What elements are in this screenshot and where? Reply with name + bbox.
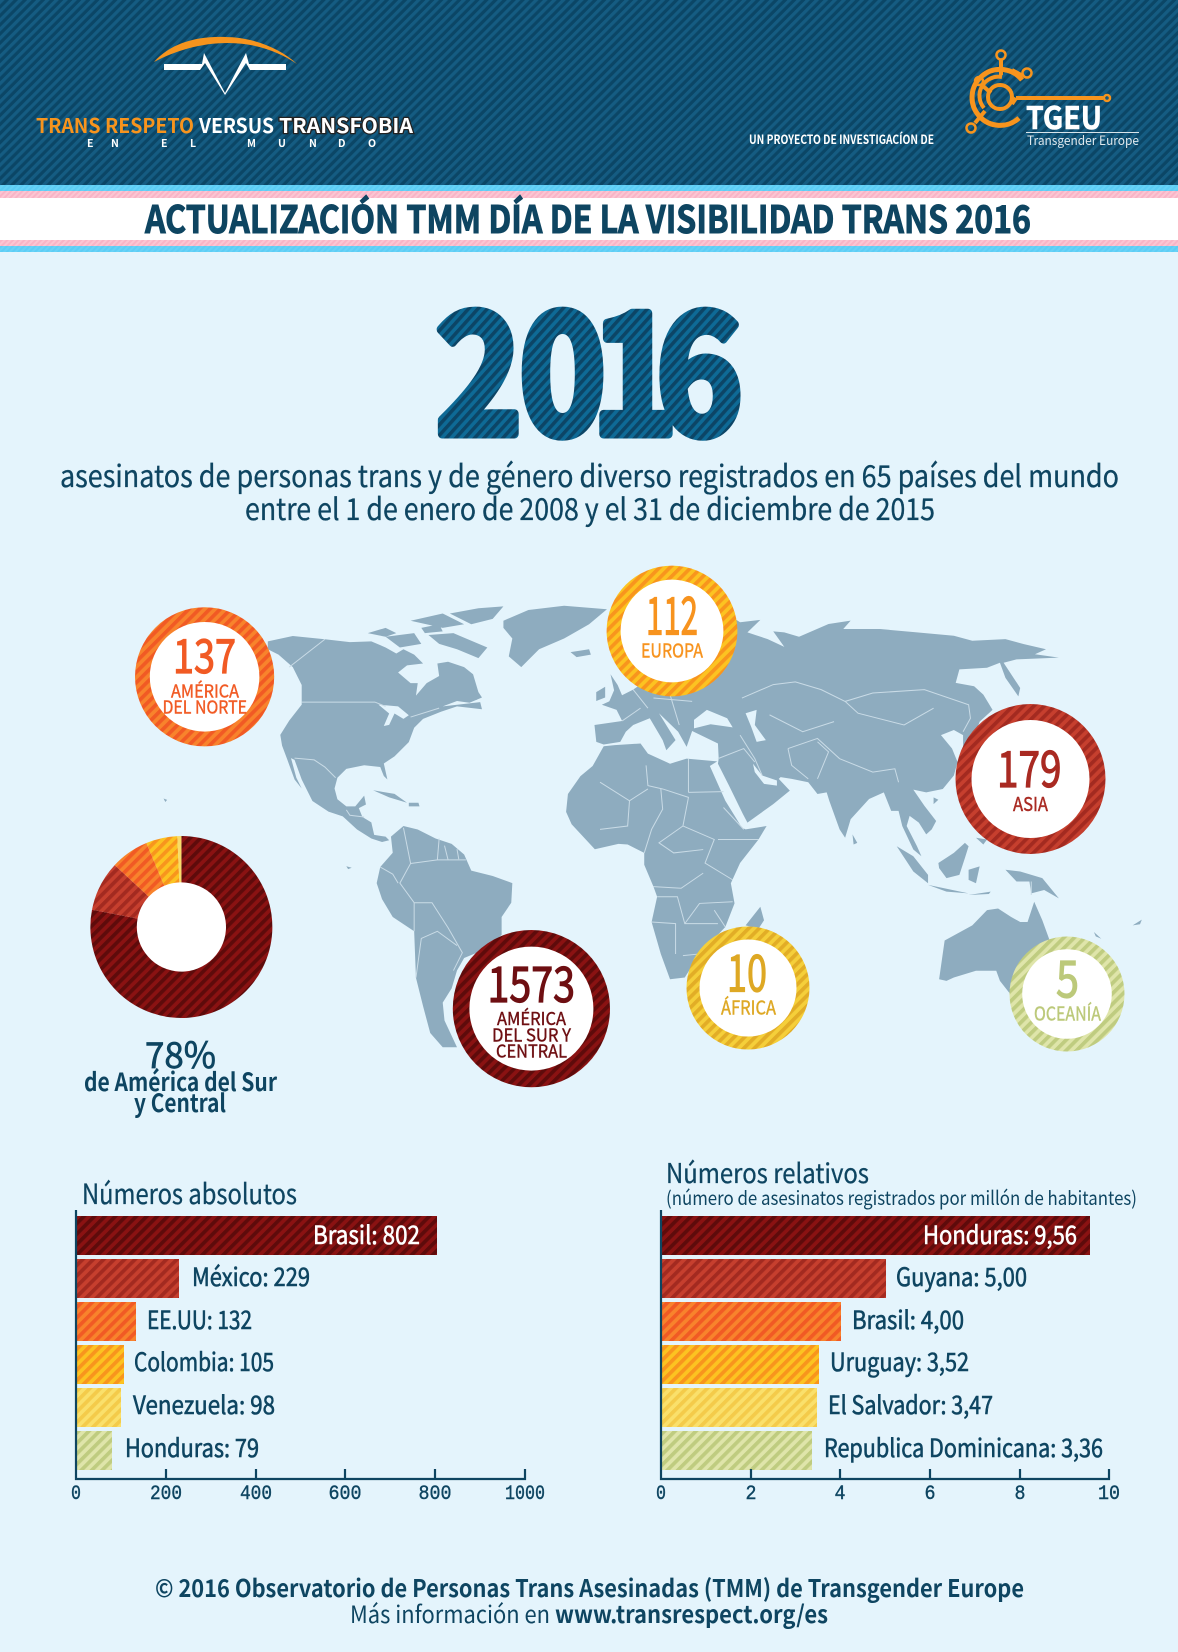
- bars: [662, 1216, 1090, 1470]
- axis: 0: [656, 1483, 666, 1506]
- logo wordmark: versus: VERSUS: [198, 110, 274, 139]
- stat: América del Sur y Central: DEL SUR Y: [492, 1022, 571, 1048]
- stat: Europa: [607, 566, 737, 696]
- Transgender Europe: Transgender Europe: [1027, 130, 1139, 149]
- axis: 200: [150, 1483, 182, 1506]
- stat: Oceanía: [1010, 936, 1124, 1052]
- bar labels: Republica Dominicana: 3,36: [824, 1429, 1103, 1465]
- logo tagline: D: [338, 136, 346, 151]
- Africa: [566, 744, 767, 979]
- axis: 1000: [505, 1483, 545, 1506]
- logo tagline: N: [111, 136, 119, 151]
- axis: 8: [1014, 1483, 1026, 1506]
- logo tagline: U: [278, 136, 286, 151]
- bar labels: Colombia: 105: [134, 1343, 274, 1379]
- bar labels: Honduras: 9,56: [923, 1216, 1077, 1252]
- stat: Europa: 112: [646, 574, 698, 650]
- stat: África: ÁFRICA: [721, 994, 776, 1020]
- bar labels: [824, 1216, 1103, 1465]
- TGEU letters: TGEU: [1026, 93, 1102, 138]
- chart: Números absolutos: [71, 1173, 545, 1506]
- footer: © 2016 Observatorio de Personas Trans Asesinadas (TMM) de Transgender Europe: [155, 1569, 1024, 1604]
- stat: América del Norte: AMÉRICA: [171, 678, 239, 704]
- logo tagline: M: [247, 136, 256, 151]
- bar labels: Uruguay: 3,52: [830, 1343, 969, 1379]
- map: Americas: [164, 606, 607, 1047]
- chart: Números relativos: [656, 1152, 1137, 1506]
- logo: Trans Respeto versus Transfobia: [36, 37, 413, 151]
- stat: América del Sur y Central: AMÉRICA: [497, 1005, 566, 1031]
- logo tagline: O: [368, 136, 376, 151]
- stat: África: [686, 926, 810, 1050]
- logo wordmark: TRANS RESPETO: [36, 110, 194, 139]
- stat: América del Sur y Central: 1573: [488, 946, 575, 1017]
- stat: Asia: 179: [997, 730, 1062, 802]
- logo icon: arc and heartbeat: [154, 37, 297, 95]
- Greenland: [503, 606, 607, 667]
- Australia and islands: [746, 797, 1142, 998]
- bar labels: México: 229: [192, 1258, 310, 1294]
- donut chart: [90, 836, 272, 1018]
- logo tagline: L: [190, 136, 196, 151]
- stat: Asia: ASIA: [1013, 790, 1048, 817]
- donut caption: de América del Sur: [84, 1063, 277, 1099]
- donut caption: y Central: [134, 1084, 226, 1120]
- axis: 800: [418, 1483, 452, 1506]
- world map: [164, 606, 1142, 1047]
- logo wordmark: transfobia: TRANSFOBIA: [279, 110, 413, 139]
- bar labels: Brasil: 802: [313, 1216, 420, 1252]
- bar labels: Honduras: 79: [125, 1429, 259, 1465]
- stat: América del Norte: 137: [173, 618, 236, 687]
- big year: 2016: [436, 245, 743, 481]
- stat: América del Sur y Central: [453, 930, 610, 1087]
- stat: Asia: [956, 704, 1106, 854]
- stat: Oceanía: OCEANÍA: [1034, 1000, 1101, 1026]
- logo: TGEU: [966, 50, 1139, 149]
- header band: [0, 0, 1178, 185]
- stat: América del Sur y Central: CENTRAL: [496, 1038, 567, 1064]
- logo tagline: N: [309, 136, 317, 151]
- footer: Más información en: [350, 1595, 550, 1630]
- footer: [155, 1569, 1024, 1630]
- bar labels: Venezuela: 98: [133, 1386, 275, 1422]
- stat: América del Norte: [135, 607, 274, 746]
- logo tagline: E: [87, 136, 93, 151]
- donut caption: [84, 1027, 277, 1120]
- axis: 400: [240, 1483, 272, 1506]
- axis: [656, 1210, 1120, 1506]
- chart heading: Números relativos: [666, 1152, 869, 1191]
- axis: 600: [328, 1483, 362, 1506]
- subtitle: [60, 452, 1119, 529]
- bar labels: [125, 1216, 420, 1465]
- axis: 10: [1098, 1483, 1120, 1506]
- axis: [71, 1210, 545, 1506]
- axis: 0: [71, 1483, 81, 1506]
- subtitle: entre el 1 de enero de 2008 y el 31 de diciembre de 2015: [245, 485, 935, 529]
- bars: [77, 1216, 437, 1470]
- stat: Oceanía: 5: [1056, 938, 1079, 1012]
- TGEU circuit icon: [966, 50, 1110, 132]
- project credit: UN PROYECTO DE INVESTIGACÍON DE: [749, 129, 934, 148]
- title band: [0, 185, 1178, 252]
- bar labels: El Salvador: 3,47: [828, 1386, 993, 1422]
- donut caption: 78%: [145, 1027, 216, 1079]
- chart heading: Números absolutos: [82, 1173, 297, 1213]
- map: Eurasia, Africa, Oceania: [566, 611, 1142, 998]
- bar labels: Brasil: 4,00: [852, 1301, 964, 1337]
- stat: África: 10: [727, 932, 767, 1006]
- axis: 2: [746, 1483, 756, 1506]
- bar labels: Guyana: 5,00: [896, 1258, 1027, 1294]
- bar labels: EE.UU: 132: [147, 1301, 252, 1337]
- stat: América del Norte: DEL NORTE: [162, 694, 247, 720]
- title: ACTUALIZACIÓN TMM DÍA DE LA VISIBILIDAD TRANS 2016: [144, 189, 1031, 244]
- stat: Europa: EUROPA: [641, 636, 703, 664]
- logo tagline: E: [161, 136, 167, 151]
- axis: 6: [924, 1483, 936, 1506]
- map: Iceland, British Isles: [571, 649, 623, 703]
- axis: 4: [834, 1483, 846, 1506]
- footer: www.transrespect.org/es: [555, 1595, 828, 1630]
- South America: [377, 826, 512, 1047]
